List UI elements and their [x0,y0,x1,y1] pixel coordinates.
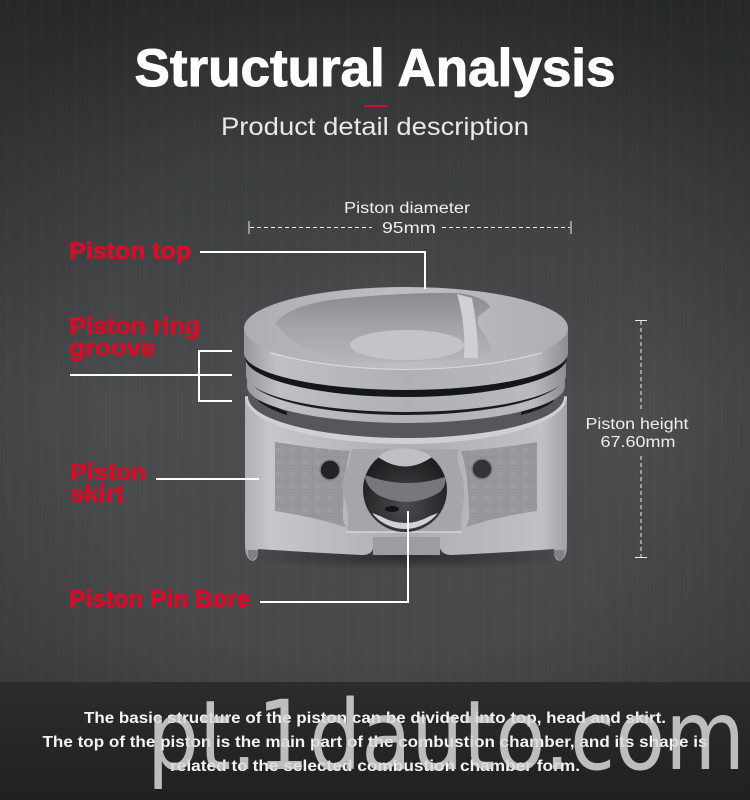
label: piston ring groove: Piston ring [69,313,200,340]
recess [248,385,564,438]
lower skirt edge [346,531,462,533]
label: piston top [69,238,425,289]
combustion bowl [275,293,492,362]
piston height dimension [586,320,689,558]
piston height dimension: 67.60mm [600,434,676,451]
piston height dimension: Piston height [586,416,689,433]
pin bore [363,448,447,532]
label: piston pin bore: Piston Pin Bore [69,586,250,613]
bowl center [350,330,464,360]
title accent line [364,105,388,107]
label: piston skirt: Piston [70,459,146,486]
piston illustration [241,287,571,570]
ring lands and grooves [245,357,567,444]
piston diameter dimension: 95mm [382,220,436,237]
crown edge highlight [270,353,542,370]
bottom description band [0,682,750,800]
title: Structural Analysis [134,39,616,98]
left leg notch [248,550,258,561]
piston diameter dimension: Piston diameter [344,200,470,217]
right leg notch [554,550,564,561]
piston diameter dimension [249,200,571,237]
crown face [244,287,568,369]
piston crown [244,287,568,390]
oil slots [258,398,554,415]
label: piston top: Piston top [69,238,191,265]
second land [246,358,566,412]
left window panel [275,442,350,527]
description text: The top of the piston is the main part of the combustion chamber, and its shape is [42,734,707,751]
second groove [248,376,564,415]
label: piston ring groove: groove [69,335,155,362]
description text: related to the selected combustion chamber form. [170,758,580,775]
crown side [244,328,568,390]
label: piston ring groove [69,313,232,401]
pin bore hole [385,506,399,512]
description text: The basic structure of the piston can be divided into top, head and skirt. [84,710,666,727]
right oil hole [472,459,492,479]
label: piston skirt [70,459,259,508]
bottom center tab [373,537,440,555]
description text [42,710,707,775]
pin bore upper crescent [378,448,432,466]
third land [247,378,565,423]
first groove [245,357,567,397]
piston shadow [241,544,571,570]
piston skirt [245,396,567,561]
pin boss [342,449,464,532]
label: piston pin bore [69,511,408,613]
left oil hole [320,460,340,480]
pin bore inner highlight [365,475,445,502]
label: piston skirt: skirt [70,481,124,508]
pin bore rim [372,513,438,529]
skirt rim [245,397,567,444]
valve ridge [457,294,478,358]
right window panel [461,442,537,527]
subtitle: Product detail description [221,113,529,141]
